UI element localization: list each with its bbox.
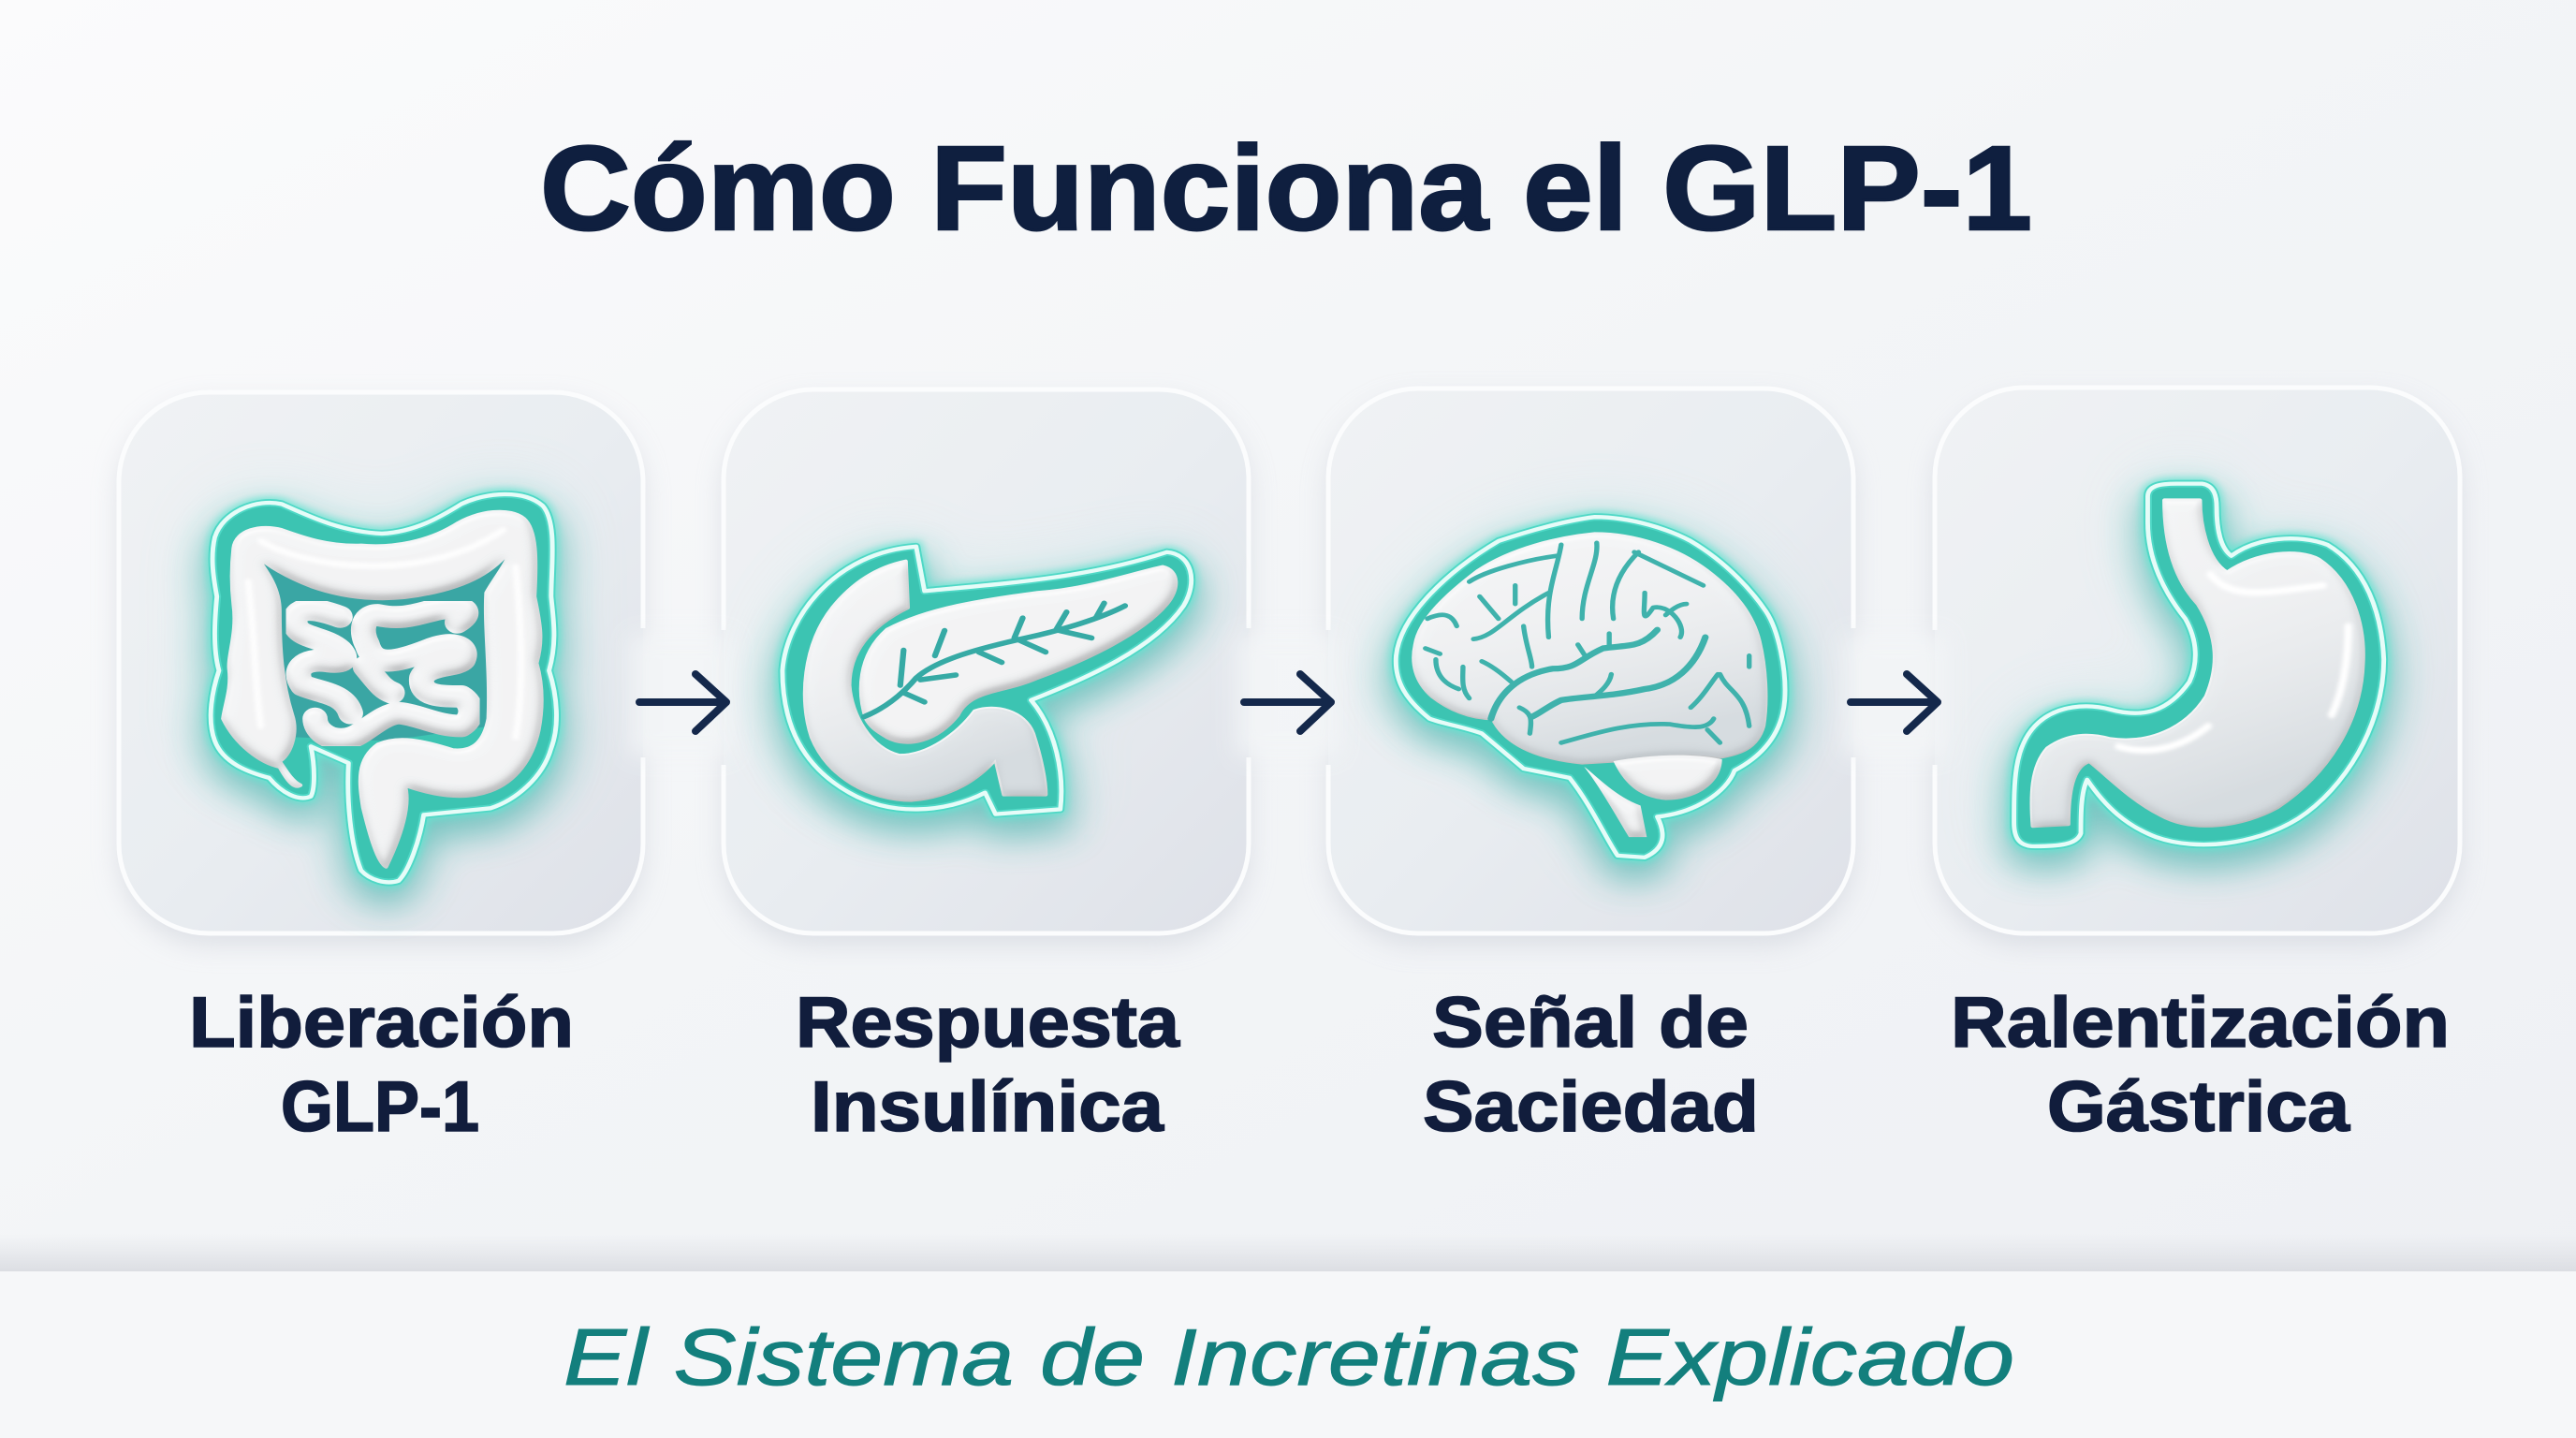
label: Liberación GLP-1: [189, 983, 574, 1147]
label: Liberación GLP-1: Liberación: [189, 983, 574, 1063]
label: Respuesta Insulínica: [796, 983, 1180, 1147]
title: Cómo Funciona el GLP-1: [540, 122, 2032, 256]
icon: stomach: [2014, 484, 2384, 862]
subtitle: El Sistema de Incretinas Explicado: [564, 1313, 2014, 1402]
stomach highlights: [2118, 574, 2349, 750]
arrow: step 2 to 3: [1244, 674, 1331, 731]
label: Liberación GLP-1: GLP-1: [281, 1067, 479, 1147]
label: Señal de Saciedad: [1423, 983, 1759, 1147]
icon: intestine: [211, 494, 556, 899]
label: Señal de Saciedad: Saciedad: [1423, 1067, 1759, 1147]
cerebrum: [1413, 534, 1766, 763]
arrow: step 3 to 4: [1851, 674, 1938, 731]
brain stem: [1584, 767, 1647, 837]
footer band: [0, 1234, 2576, 1438]
small intestine: [295, 608, 471, 740]
label: Ralentización Gástrica: Ralentización: [1951, 983, 2450, 1063]
stomach body: [2032, 500, 2364, 826]
panel: respuesta card: [724, 389, 1249, 945]
brain shading: [1413, 534, 1766, 763]
panel: saciedad card: [1328, 389, 1853, 945]
panel: gástrica card: [1935, 388, 2460, 945]
icon: pancreas: [783, 547, 1192, 830]
pancreas body: [861, 567, 1176, 742]
colon highlight: [248, 530, 521, 737]
panel: liberación card: [119, 392, 643, 945]
cerebellum: [1614, 756, 1722, 800]
inner cavity: [261, 552, 507, 741]
label: Ralentización Gástrica: [1951, 983, 2450, 1147]
colon: [223, 512, 542, 867]
label: Ralentización Gástrica: Gástrica: [2047, 1067, 2350, 1147]
icon: brain: [1396, 517, 1785, 873]
stomach shading: [2032, 500, 2364, 826]
brain sulci: [1426, 543, 1749, 742]
label: Señal de Saciedad: Señal de: [1432, 983, 1749, 1063]
label: Respuesta Insulínica: Respuesta: [796, 983, 1180, 1063]
label: Respuesta Insulínica: Insulínica: [811, 1067, 1164, 1147]
arrow: step 1 to 2: [639, 674, 726, 731]
soft fades behind arrows: [629, 635, 1947, 756]
pancreatic ducts: [864, 603, 1125, 717]
pancreas shading: [805, 562, 1046, 800]
pancreas head: [805, 562, 1046, 800]
